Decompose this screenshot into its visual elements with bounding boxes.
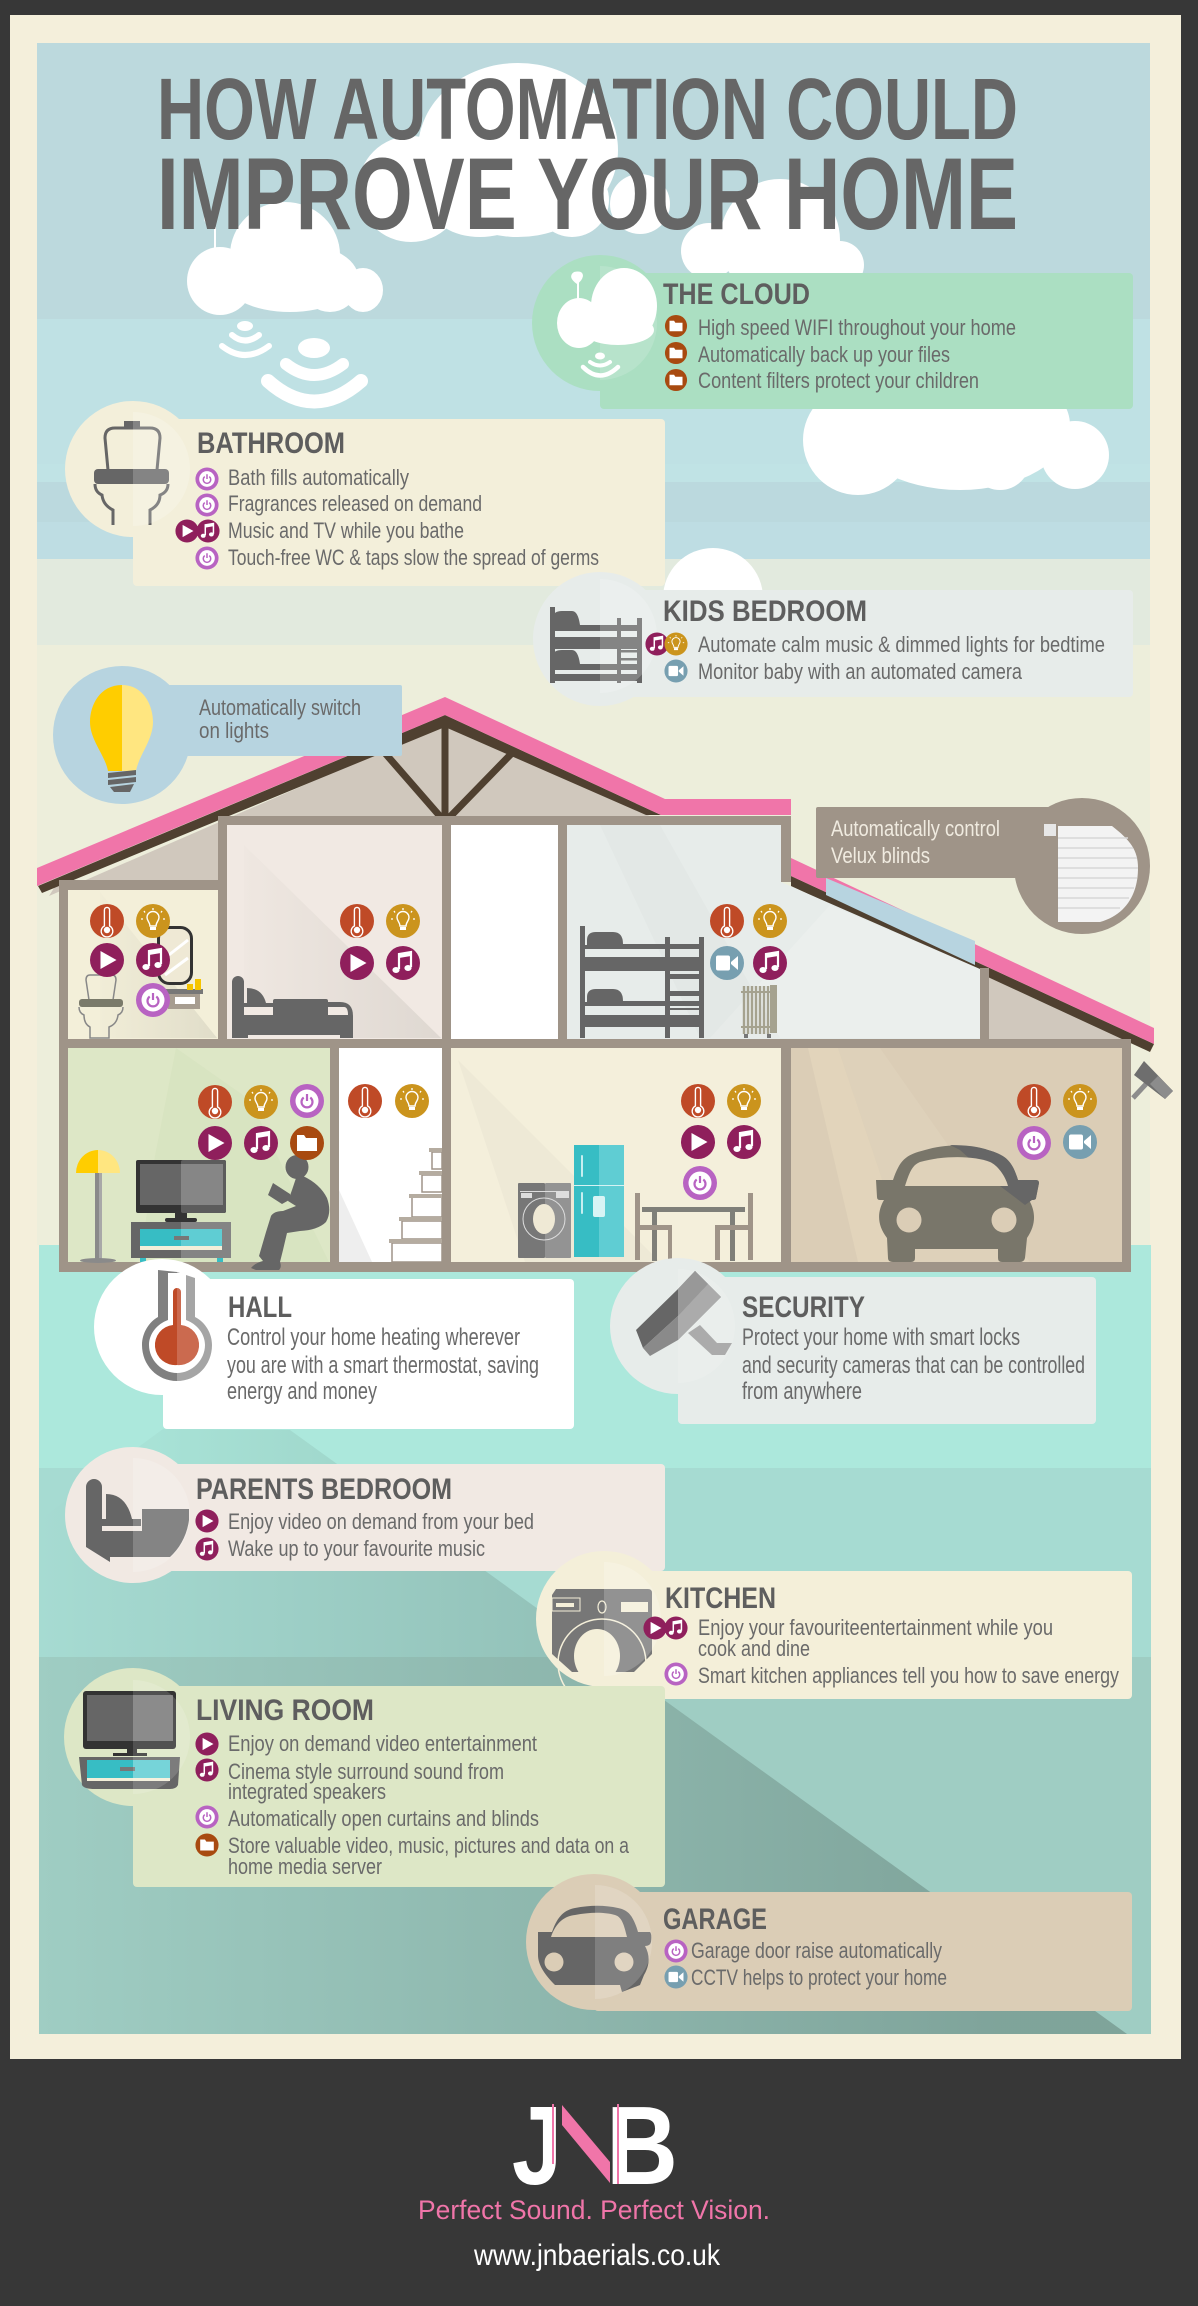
icon: video [198, 1126, 232, 1160]
feature list [228, 465, 599, 570]
description: from anywhere [742, 1378, 862, 1405]
washing machine [518, 1183, 571, 1258]
icon: power [195, 546, 219, 570]
security camera [1133, 1061, 1173, 1099]
feature list: home media server [228, 1854, 382, 1879]
icon: lights [1063, 1084, 1097, 1118]
icon: music [727, 1125, 761, 1159]
car [876, 1145, 1039, 1262]
heading: hall: HALL [228, 1291, 292, 1324]
icon: play [175, 519, 199, 543]
callout text [199, 695, 361, 743]
icon: television [79, 1680, 190, 1794]
icon: music [645, 632, 669, 656]
callout text: Velux blinds [831, 843, 930, 868]
room: kids bedroom [567, 825, 980, 1039]
feature list: Content filters protect your children [698, 368, 979, 393]
toilet [79, 975, 123, 1038]
feature list: cook and dine [698, 1636, 810, 1661]
description: energy and money [227, 1378, 377, 1405]
icon: thermostat [348, 1084, 382, 1118]
icon: thermostat [90, 904, 124, 938]
icon: play [195, 1732, 219, 1756]
roof [37, 697, 1154, 1052]
description: you are with a smart thermostat, saving [227, 1352, 539, 1379]
footer website: www.jnbaerials.co.uk [473, 2239, 721, 2272]
heading: kitchen: KITCHEN [665, 1582, 776, 1615]
house [37, 697, 1173, 1272]
icon: music [195, 1537, 219, 1561]
icon: thermometer [142, 1270, 212, 1381]
icon: power [683, 1166, 717, 1200]
icon: video [340, 946, 374, 980]
walls [59, 816, 1131, 1272]
description: and security cameras that can be controlled [742, 1352, 1085, 1379]
icon: thermostat [681, 1084, 715, 1118]
icon: thermostat [1017, 1084, 1051, 1118]
heading: living room: LIVING ROOM [196, 1694, 374, 1727]
icon: play [643, 1616, 667, 1640]
feature list: Automate calm music & dimmed lights for bedtime [698, 632, 1105, 657]
heading: the cloud: THE CLOUD [663, 278, 810, 311]
radiator [741, 985, 777, 1038]
icon: thermostat [710, 904, 744, 938]
heading: security: SECURITY [742, 1291, 865, 1324]
callout text [831, 816, 1000, 868]
panel: parents bedroom [65, 1447, 665, 1583]
callout: velux blinds [816, 798, 1150, 934]
icon: cloud with wifi [557, 266, 657, 380]
feature list: High speed WIFI throughout your home [698, 315, 1016, 340]
icon: bed [86, 1458, 190, 1572]
heading: parents bedroom: PARENTS BEDROOM [196, 1473, 452, 1506]
feature list [228, 1731, 630, 1879]
description: Protect your home with smart locks [742, 1324, 1020, 1351]
panel: living room [64, 1668, 665, 1887]
heading: kids bedroom: KIDS BEDROOM [663, 595, 867, 628]
feature list: Cinema style surround sound from [228, 1759, 504, 1784]
icon: power [195, 1805, 219, 1829]
panel: hall [94, 1259, 574, 1429]
panel: bathroom [65, 401, 665, 586]
feature list [698, 1615, 1119, 1688]
icon: power [136, 983, 170, 1017]
icon: folder [665, 369, 687, 391]
room: hall and stairs [339, 1048, 442, 1262]
icon: power [195, 493, 219, 517]
icon: lights [386, 904, 420, 938]
light shaft [826, 878, 975, 965]
icon: music [136, 943, 170, 977]
icon: power [195, 467, 219, 491]
callout text: Automatically control [831, 816, 1000, 841]
icon: thermostat [198, 1085, 232, 1119]
title [157, 61, 1018, 251]
feature list: Enjoy on demand video entertainment [228, 1731, 537, 1756]
icon: power [290, 1084, 324, 1118]
icon: music [664, 1616, 688, 1640]
icon: lights [727, 1084, 761, 1118]
feature list: Fragrances released on demand [228, 491, 482, 516]
bed [232, 976, 353, 1038]
feature list [691, 1938, 947, 1990]
feature list: Music and TV while you bathe [228, 518, 464, 543]
description [742, 1324, 1085, 1405]
panel: security [610, 1258, 1096, 1424]
icon: music [753, 946, 787, 980]
icon: camera [1063, 1125, 1097, 1159]
callout text: on lights [199, 718, 269, 743]
panel: the cloud [532, 255, 1133, 409]
floor lamp [76, 1150, 120, 1263]
room: living room [68, 1048, 330, 1270]
seated person reading [251, 1155, 329, 1270]
icon: blinds [1044, 824, 1138, 922]
icon: video [90, 943, 124, 977]
feature list [228, 1509, 534, 1561]
icon: thermostat [340, 904, 374, 938]
panel: garage [526, 1874, 1132, 2011]
panel: kitchen [536, 1551, 1132, 1707]
feature list: Enjoy your favouriteentertainment while you [698, 1615, 1053, 1640]
icon: music [244, 1126, 278, 1160]
icon: music [386, 946, 420, 980]
icon: wifi signals [222, 321, 361, 402]
sink [162, 979, 203, 1009]
icon: light bulb [90, 685, 153, 792]
icon: folder [290, 1126, 324, 1160]
room: bathroom [68, 890, 218, 1039]
icon: lights [395, 1084, 429, 1118]
icon: bunk bed [550, 579, 657, 693]
room: kitchen [451, 1048, 781, 1262]
footer logo: JNB: B [606, 2084, 678, 2208]
icon: folder [665, 342, 687, 364]
bunk bed [580, 926, 704, 1038]
feature list: Touch-free WC & taps slow the spread of germs [228, 545, 599, 570]
footer tagline: Perfect Sound. Perfect Vision. [418, 2195, 770, 2225]
icon: lights [136, 904, 170, 938]
room: stairwell [451, 825, 558, 1039]
feature list: integrated speakers [228, 1779, 386, 1804]
feature list: Automatically open curtains and blinds [228, 1806, 539, 1831]
feature list [698, 315, 1016, 393]
footer logo: JNB: J [512, 2084, 562, 2208]
feature list: CCTV helps to protect your home [691, 1965, 947, 1990]
fridge [574, 1145, 624, 1257]
icon: play [195, 1509, 219, 1533]
icon: folder [665, 315, 687, 337]
clouds [187, 63, 1109, 648]
description [227, 1324, 539, 1405]
icon: camera [710, 946, 744, 980]
feature list: Store valuable video, music, pictures and data on a [228, 1833, 630, 1858]
feature list: Wake up to your favourite music [228, 1536, 485, 1561]
icon: video [681, 1125, 715, 1159]
room: parents bedroom [227, 825, 442, 1039]
feature list: Monitor baby with an automated camera [698, 659, 1023, 684]
feature list: Garage door raise automatically [691, 1938, 942, 1963]
icon: folder [195, 1833, 219, 1857]
icon: music [196, 519, 220, 543]
icon: music [195, 1758, 219, 1782]
heading: garage: GARAGE [663, 1903, 767, 1936]
icon: car [538, 1885, 652, 1999]
roof trusses [384, 722, 513, 822]
room: garage [791, 1048, 1122, 1262]
footer logo: JNB [512, 2084, 678, 2208]
feature list: Automatically back up your files [698, 342, 950, 367]
panel: kids bedroom [533, 572, 1133, 706]
feature list: Enjoy video on demand from your bed [228, 1509, 534, 1534]
callout: lights [53, 666, 402, 804]
icon: power [664, 1662, 688, 1686]
icon: lights [753, 904, 787, 938]
mirror [158, 928, 192, 984]
icon: camera [636, 1269, 735, 1383]
icon: light [664, 632, 688, 656]
callout text: Automatically switch [199, 695, 361, 720]
television and stand [131, 1160, 231, 1262]
icon: camera [664, 1965, 688, 1989]
icon: power [1017, 1126, 1051, 1160]
room control icons [90, 904, 1097, 1200]
feature list: Bath fills automatically [228, 465, 409, 490]
icon: power [664, 1939, 688, 1963]
icon: washing machine [552, 1562, 661, 1707]
dining table and chairs [635, 1193, 753, 1261]
icon: video [664, 659, 688, 683]
description: Control your home heating wherever [227, 1324, 520, 1351]
heading: bathroom: BATHROOM [197, 427, 345, 460]
icon: lights [244, 1085, 278, 1119]
feature list [698, 632, 1105, 684]
icon: toilet [94, 412, 190, 526]
